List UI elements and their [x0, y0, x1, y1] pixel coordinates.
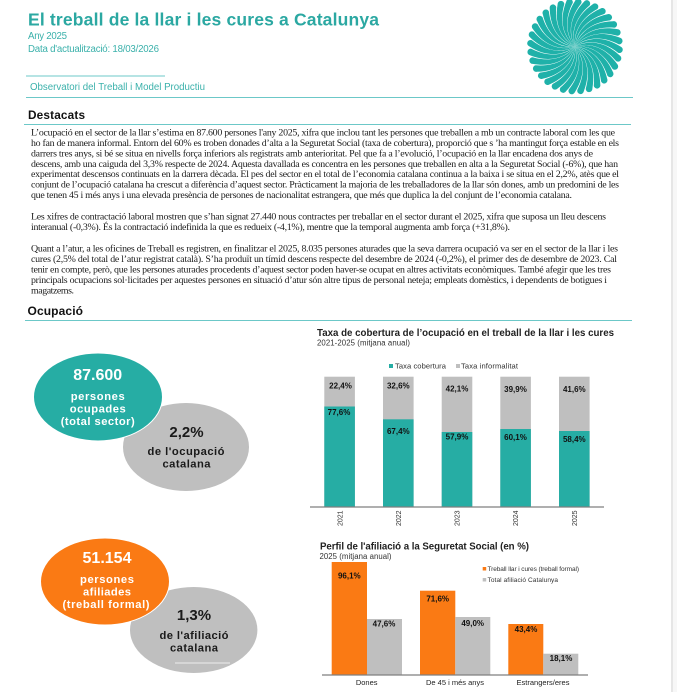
callout: occupied persons — [34, 353, 249, 491]
text block: employment paragraph: experimentat descensos continuats en la darrera dècada. El pes del sector en el total de l’economia catalana continua a la baixa i se situa en el 2,2%, atès que el — [31, 169, 619, 180]
gray ellipse: share of Catalan affiliation: 1,3% — [177, 607, 211, 624]
update date: Data d'actualització: 18/03/2026 — [28, 44, 159, 55]
bar 2023: 2023 — [454, 510, 462, 526]
callout: affiliated persons — [40, 538, 257, 673]
bar 2023: 42,1% — [446, 384, 468, 393]
legend: Total afiliació Catalunya — [488, 577, 558, 584]
orange ellipse: 51.154 persons: persones — [80, 574, 134, 586]
bar 2021: 22,4% — [329, 381, 352, 390]
chart title: Perfil de l'afiliació a la Seguretat Social (en %) — [320, 542, 529, 552]
text block: employment paragraph: L’ocupació en el sector de la llar s’estima en 87.600 persones l'any 2025, xifra que inclou tant les persones que treballen a mb un contracte laboral com les que — [31, 128, 616, 138]
bar 2024 — [500, 377, 531, 526]
legend: Treball llar i cures (treball formal) — [488, 566, 579, 573]
legend — [483, 566, 579, 584]
chart: coverage rate stacked bars — [310, 328, 614, 526]
legend — [389, 362, 519, 370]
group: Estrangers/eres — [508, 624, 578, 687]
legend: Taxa informalitat — [461, 362, 519, 370]
group: Dones: 96,1% — [338, 572, 361, 581]
icon: spiral logo — [526, 0, 624, 96]
heading: Ocupació: Ocupació — [28, 304, 83, 318]
text block: employment paragraph: ho fan de manera informal. Entorn del 60% es troben donades d’alta a la Seguretat Social (taxa de cobertura), proporció que s ’ha mantingut força estable en els — [31, 138, 619, 149]
teal ellipse: 87.600 persons: (total sector) — [61, 416, 135, 428]
bar 2022 — [383, 377, 414, 526]
gray ellipse: share of Catalan employment — [123, 403, 249, 491]
text block: contracts paragraph — [31, 212, 606, 233]
legend: Taxa cobertura — [395, 362, 447, 370]
group: Dones — [332, 562, 402, 687]
text block: unemployment paragraph — [31, 244, 618, 296]
text block: unemployment paragraph: tenir en compte, però, que les persones aturades procedents d’aquest sector poden haver-se ocupat en altres activitats econòmiques. També afegir que les tres — [31, 264, 611, 276]
title: El treball de la llar i les cures a Catalunya — [28, 10, 379, 30]
bar 2024: 60,1% — [504, 433, 527, 442]
group: De 45 i més anys: De 45 i més anys — [426, 678, 484, 687]
bar 2023 — [442, 377, 472, 526]
text block: employment paragraph: descens, amb una caiguda del 3,3% respecte de 2024. Aquesta davallada es concentra en les persones que treballen en alta a la Seguretat Social (-6%), que han — [31, 159, 618, 170]
text block: contracts paragraph: interanual (-0,3%). És la contractació indefinida la que es redueix (-4,1%), mentre que la temporal augmenta amb força (+31,8%). — [31, 221, 510, 233]
text block: unemployment paragraph: Quant a l’atur, a les oficines de Treball es registren, en finalitzar el 2025, 8.035 persones aturades que la seva darrera ocupació va ser en el sector de la llar i les — [31, 244, 618, 254]
text block: employment paragraph: darrers tres anys, si bé se situa en nivells força inferiors als registrats amb anterioritat. Pel que fa a l’evolució, l’ocupació en la llar encadena dos anys de — [31, 148, 594, 159]
bar 2024: 39,9% — [504, 385, 527, 394]
header text — [28, 10, 379, 93]
teal ellipse: 87.600 persons: 87.600 — [73, 367, 122, 384]
text block: unemployment paragraph: cures (2,5% del total de l’atur registrat català). S’ha produït un tímid descens respecte del desembre de 2024 (-0,2%), el primer des de desembre de 2023. Cal — [31, 254, 617, 265]
group: Estrangers/eres: 43,4% — [515, 625, 537, 634]
chart subtitle: 2025 (mitjana anual) — [320, 552, 392, 561]
chart: affiliation profile grouped bars — [320, 542, 588, 687]
text block: employment paragraph — [31, 128, 619, 201]
group: Dones: 47,6% — [373, 619, 395, 628]
bar 2022: 32,6% — [387, 381, 410, 390]
group: De 45 i més anys: 71,6% — [426, 595, 449, 604]
orange ellipse: 51.154 persons: 51.154 — [83, 550, 132, 567]
gray ellipse: share of Catalan employment: 2,2% — [169, 424, 204, 441]
bar 2022: 2022 — [396, 510, 403, 526]
gray ellipse: share of Catalan affiliation — [130, 587, 257, 673]
orange ellipse: 51.154 persons — [40, 538, 170, 625]
text block: unemployment paragraph: principals ocupacions sol·licitades per aquestes persones en situació d’atur són altre tipus de personal neteja; empleats domèstics, i dependents de botigues i — [31, 275, 607, 286]
gray ellipse: share of Catalan affiliation: de l'afiliació — [160, 630, 229, 642]
text block: employment paragraph: que tenen 45 i més anys i una elevada presència de persones de nacionalitat estrangera, que més que duplica la del conjunt de l’economia catalana. — [31, 190, 572, 201]
bar 2025: 41,6% — [563, 385, 586, 394]
gray ellipse: share of Catalan employment: de l'ocupació — [148, 446, 225, 458]
bar 2024: 2024 — [513, 510, 520, 526]
bar 2021: 2021 — [338, 510, 344, 526]
orange ellipse: 51.154 persons: (treball formal) — [62, 599, 150, 611]
bar 2025: 2025 — [572, 510, 579, 526]
bar 2021: 77,6% — [328, 408, 350, 417]
group: De 45 i més anys: 49,0% — [461, 619, 484, 628]
group: Estrangers/eres: 18,1% — [550, 654, 572, 663]
group: Estrangers/eres: Estrangers/eres — [517, 678, 570, 687]
text block: employment paragraph: conjunt de l’ocupació catalana ha crescut a diferència d’aquest sector. Pràcticament la majoria de les treballadores de la llar són dones, amb un predomini de les — [31, 180, 619, 191]
text block: contracts paragraph: Les xifres de contractació laboral mostren que s’han signat 27.440 nous contractes per treballar en el sector durant el 2025, xifra que suposa un lleu descens — [31, 212, 606, 222]
bar 2021 — [324, 377, 355, 526]
bar 2023: 57,9% — [446, 433, 468, 442]
teal ellipse: 87.600 persons: persones — [71, 391, 125, 403]
orange ellipse: 51.154 persons: afiliades — [83, 586, 131, 598]
group: Dones: Dones — [356, 678, 378, 687]
year: Any 2025 — [28, 31, 67, 42]
teal ellipse: 87.600 persons: ocupades — [70, 404, 126, 416]
bar 2022: 67,4% — [387, 427, 410, 436]
heading: Destacats: Destacats — [28, 108, 85, 122]
gray ellipse: share of Catalan employment: catalana — [162, 459, 211, 471]
text block: unemployment paragraph: magatzems. — [31, 286, 74, 296]
bar 2025: 58,4% — [563, 435, 586, 444]
teal ellipse: 87.600 persons — [34, 353, 162, 441]
bar 2025 — [559, 377, 590, 526]
group: De 45 i més anys — [420, 591, 490, 687]
chart title: Taxa de cobertura de l’ocupació en el treball de la llar i les cures — [317, 328, 614, 339]
organisation name: Observatori del Treball i Model Productiu — [30, 82, 205, 93]
gray ellipse: share of Catalan affiliation: catalana — [170, 643, 219, 655]
chart subtitle: 2021-2025 (mitjana anual) — [317, 339, 410, 348]
